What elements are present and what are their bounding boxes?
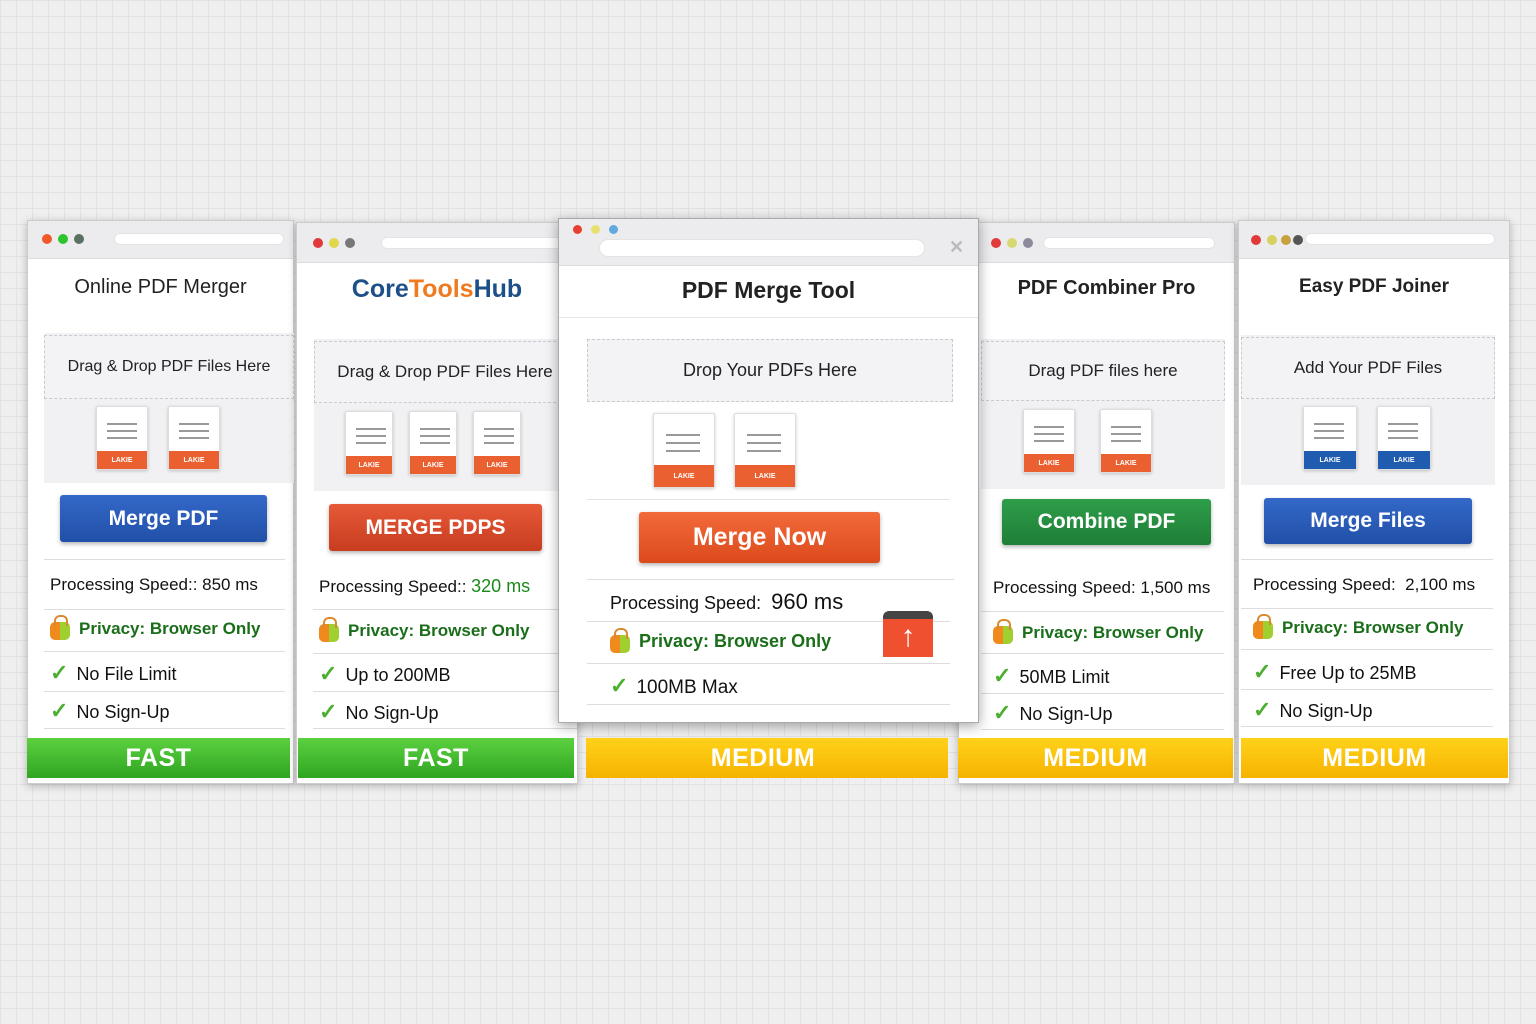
icons: documents: LAKIE [486, 462, 508, 469]
drop zone: Drag & Drop PDF Files Here [337, 362, 553, 381]
badge: FAST: FAST [403, 744, 469, 772]
title: PDF Merge Tool [682, 277, 855, 303]
badge: MEDIUM: MEDIUM [1322, 744, 1427, 772]
badge: MEDIUM center: MEDIUM [711, 744, 815, 772]
speed: Processing Speed:: 320 ms [319, 576, 530, 596]
feature: ✓ No Sign-Up [50, 698, 169, 723]
privacy [1253, 614, 1464, 639]
icons: documents: LAKIE [1116, 460, 1136, 467]
icons: documents: LAKIE [1394, 457, 1414, 464]
icons: documents [652, 412, 798, 490]
title: Online PDF Merger [74, 276, 247, 298]
drop zone: Drag PDF files here [1028, 361, 1178, 380]
drop zone [587, 339, 953, 402]
button [329, 504, 542, 551]
button [639, 512, 880, 563]
speed: Processing Speed: 1,500 ms [993, 578, 1210, 597]
badge: MEDIUM [958, 738, 1233, 778]
badge: MEDIUM center [586, 738, 948, 778]
icon: upload [883, 611, 933, 657]
icons: documents [94, 406, 222, 472]
icons: documents: LAKIE [674, 473, 694, 480]
badge: FAST [298, 738, 574, 778]
title: PDF Combiner Pro [1018, 277, 1195, 299]
button: Merge PDF [109, 507, 218, 530]
privacy: Privacy: Browser Only [79, 619, 260, 638]
privacy: Privacy: Browser Only [1282, 618, 1463, 637]
button: Combine PDF [1038, 510, 1175, 533]
icons: documents: LAKIE [422, 462, 444, 469]
button: Merge Files [1310, 509, 1426, 532]
icons: documents [1302, 406, 1432, 472]
drop zone: Drop Your PDFs Here [683, 360, 857, 380]
badge: FAST [27, 738, 290, 778]
panel: PDF Combiner Pro [958, 222, 1235, 784]
panel: CoreToolsHub [296, 222, 578, 784]
drop zone [1241, 337, 1495, 399]
button [60, 495, 267, 542]
badge: FAST: FAST [126, 744, 191, 772]
privacy [610, 628, 831, 653]
privacy: Privacy: Browser Only [639, 631, 831, 651]
icons: documents: LAKIE [754, 473, 776, 480]
button: Merge Now [693, 523, 826, 551]
panel: PDF Merge Tool (featured) [558, 218, 979, 723]
icons: documents: LAKIE [1320, 457, 1340, 464]
title: CoreToolsHub [352, 275, 522, 303]
icons: documents: LAKIE [358, 462, 380, 469]
drop zone [981, 341, 1225, 401]
feature: ✓ No Sign-Up [1253, 697, 1372, 722]
feature: ✓ No Sign-Up [993, 700, 1112, 725]
speed: Processing Speed: 960 ms [610, 589, 843, 614]
panel: Easy PDF Joiner [1238, 220, 1510, 784]
drop zone: Add Your PDF Files [1294, 358, 1442, 377]
icons: documents: LAKIE [1038, 460, 1060, 467]
icon: upload: ↑ [900, 620, 916, 653]
drop zone: Drag & Drop PDF Files Here [68, 358, 270, 375]
icons: documents: LAKIE [112, 457, 132, 464]
feature: ✓ Up to 200MB [319, 661, 450, 686]
button: MERGE PDPS [365, 516, 506, 539]
feature: ✓ No Sign-Up [319, 699, 438, 724]
title: Easy PDF Joiner [1299, 276, 1449, 297]
privacy [319, 617, 530, 642]
feature: ✓ 50MB Limit [993, 663, 1109, 688]
panel: PDF Merge Tool (featured): ✕ [949, 237, 964, 257]
feature: ✓ 100MB Max [610, 673, 738, 698]
speed: Processing Speed:: 850 ms [50, 575, 258, 594]
panel: Online PDF Merger [27, 220, 294, 784]
feature: ✓ No File Limit [50, 660, 176, 685]
privacy [50, 615, 260, 640]
drop zone [44, 335, 294, 399]
privacy: Privacy: Browser Only [1022, 623, 1203, 642]
speed: Processing Speed: 2,100 ms [1253, 575, 1475, 594]
badge: MEDIUM [1241, 738, 1508, 778]
feature: ✓ Free Up to 25MB [1253, 659, 1416, 684]
button [1002, 499, 1211, 545]
drop zone [314, 341, 576, 403]
icons: documents: LAKIE [184, 457, 204, 464]
privacy: Privacy: Browser Only [348, 621, 529, 640]
badge: MEDIUM: MEDIUM [1043, 744, 1148, 772]
button [1264, 498, 1472, 544]
privacy [993, 619, 1204, 644]
icons: documents [344, 410, 522, 478]
icons: documents [1022, 408, 1154, 476]
